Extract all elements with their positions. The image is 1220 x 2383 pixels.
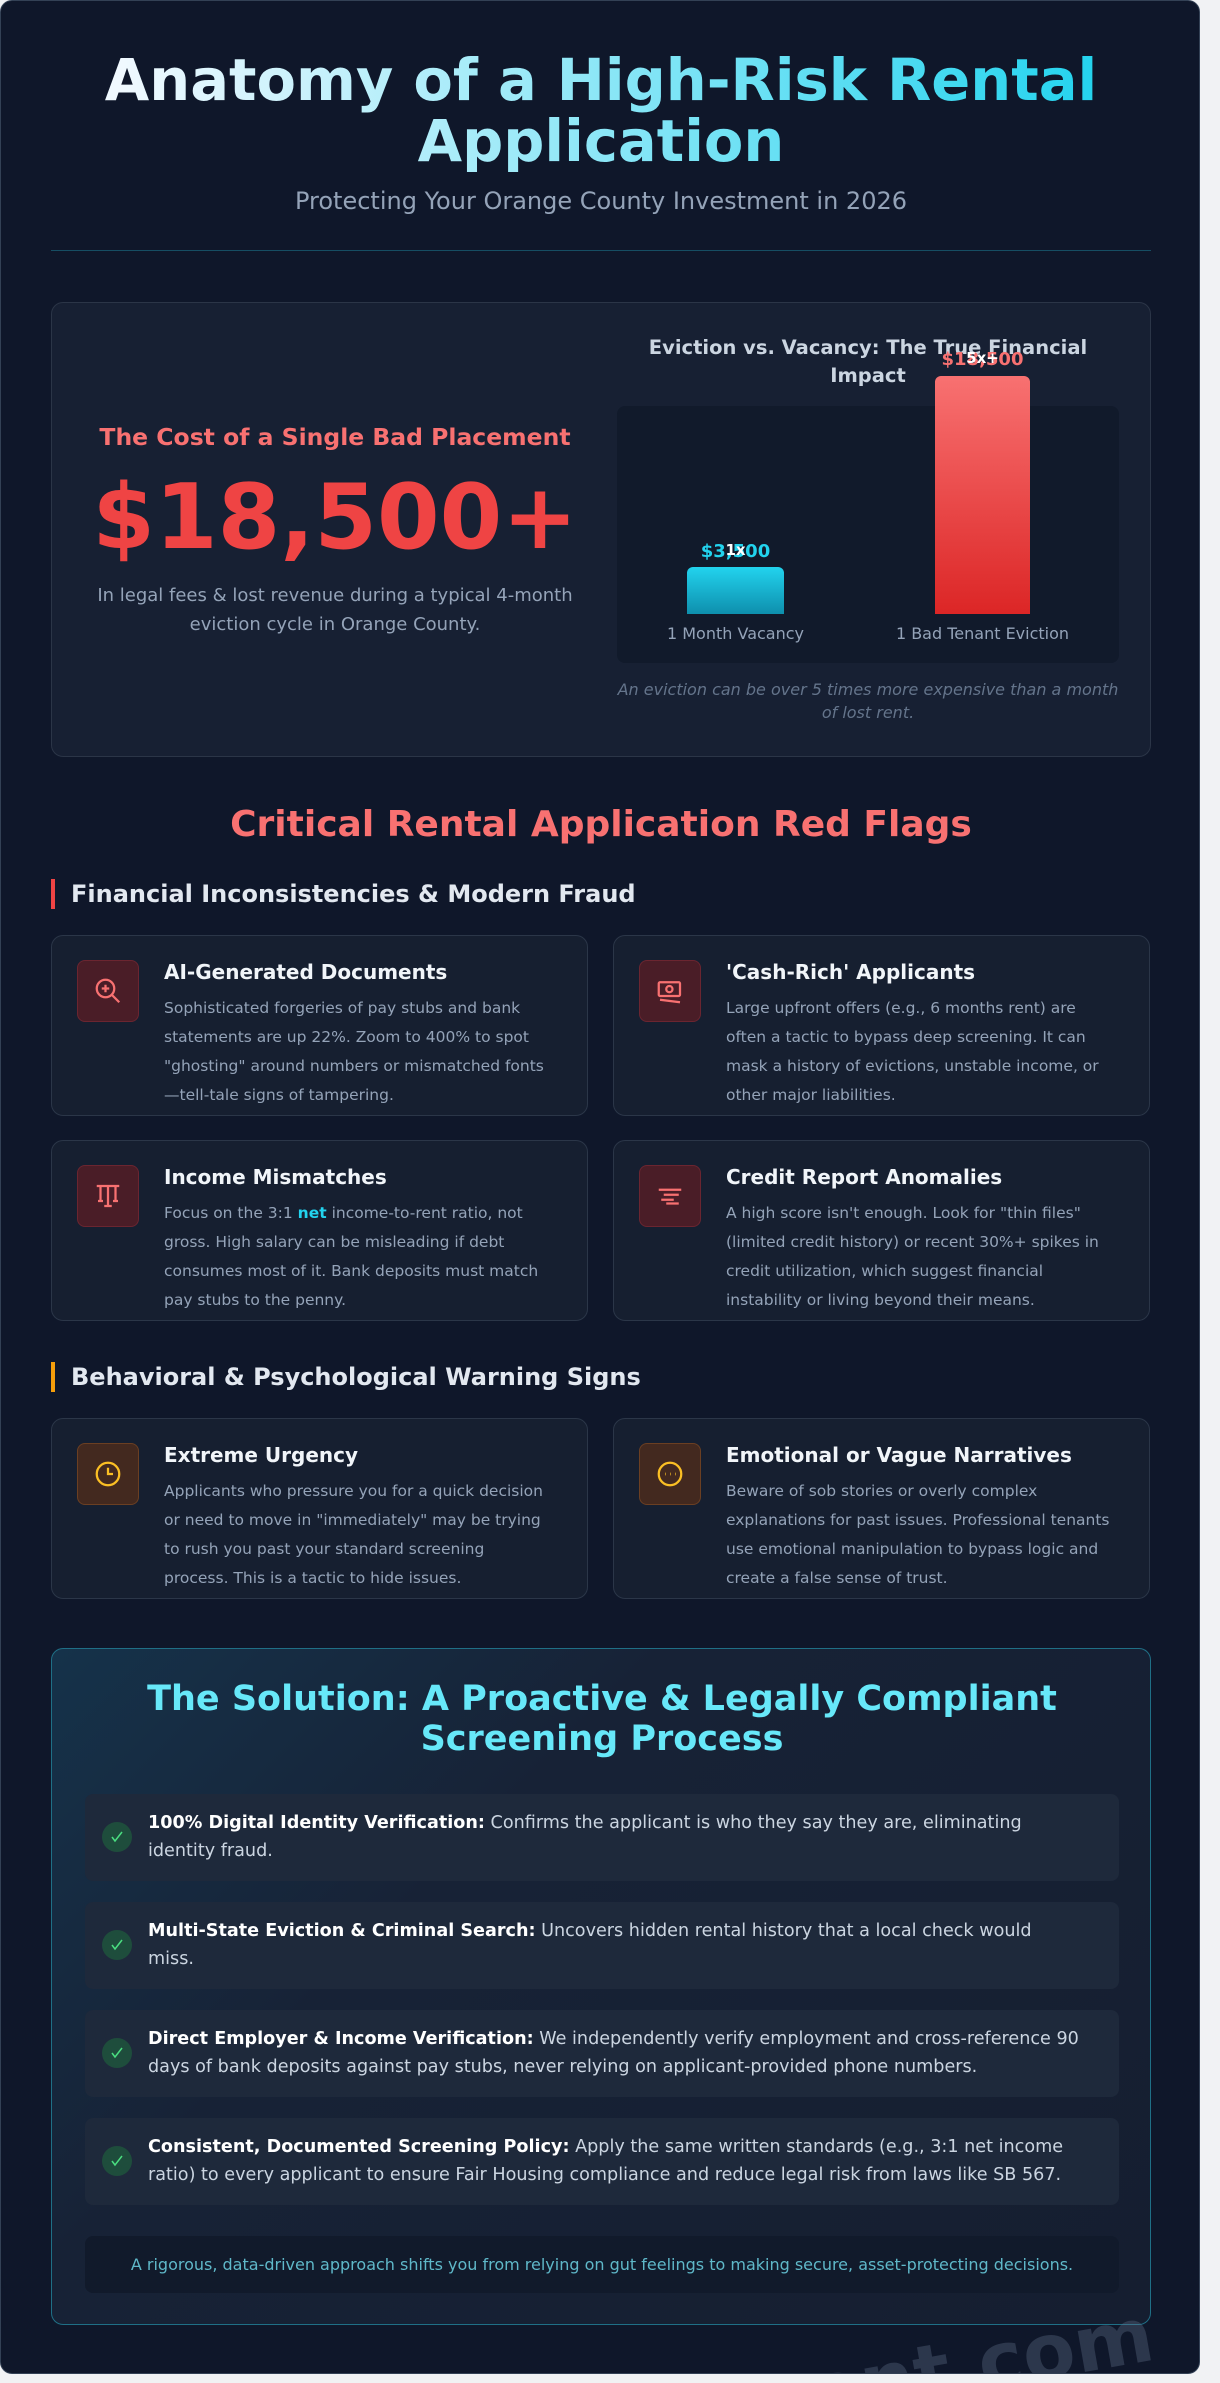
card: income mismatch [51,1140,588,1321]
panel: solution [51,1648,1151,2325]
section heading: red flags: Critical Rental Application Red Flags [230,804,972,845]
item 1 [85,1794,1119,1881]
title [1,50,1201,172]
item 2: miss. [148,1949,194,1969]
card: income mismatch: Focus on the 3:1 net income-to-rent ratio, not gross. High salary can be misleading if debt consumes most of it. Bank deposits must match pay stubs to the penny. [164,1204,538,1309]
card: AI documents: AI-Generated Documents [164,960,447,984]
item 1: 100% Digital Identity Verification: Confirms the applicant is who they say they are, eliminating [148,1813,1022,1833]
card: urgency: Applicants who pressure you for a quick decision or need to move in "immediately" may be trying to rush you past your standard screening process. This is a tactic to hide issues. [164,1482,543,1587]
solution title [147,1679,1057,1759]
card: cash-rich: 'Cash-Rich' Applicants [726,960,975,984]
item 3 [85,2010,1119,2097]
item 2: Multi-State Eviction & Criminal Search: Uncovers hidden rental history that a local check would [148,1921,1032,1941]
card: narratives: Emotional or Vague Narratives [726,1443,1072,1467]
icon: magnifier [77,960,139,1022]
card: narratives: Beware of sob stories or overly complex explanations for past issues. Professional tenants use emotional manipulation to bypass logic and create a false sense of trust. [726,1482,1110,1587]
footer note: A rigorous, data-driven approach shifts you from relying on gut feelings to making secure, asset-protecting decisions. [131,2255,1073,2274]
item 4 [85,2118,1119,2205]
title: Application [418,108,784,175]
panel: cost of bad placement: 1 Month Vacancy [667,624,804,643]
icon: lines [639,1165,701,1227]
title: Anatomy of a High-Risk Rental [105,47,1097,114]
panel: cost of bad placement: 1 Bad Tenant Eviction [896,624,1069,643]
description: In legal fees & lost revenue during a typical 4-month eviction cycle in Orange County. [97,585,573,635]
subtitle: Protecting Your Orange County Investment in 2026 [295,187,907,215]
footer note [85,2236,1119,2293]
panel: cost of bad placement: $18,500 [942,349,1023,370]
card: urgency [51,1418,588,1599]
subheading: financial: Financial Inconsistencies & Modern Fraud [71,880,636,908]
item 1: identity fraud. [148,1841,273,1861]
card: credit anomalies: Credit Report Anomalies [726,1165,1002,1189]
panel: cost of bad placement: $3,500 [701,541,770,562]
heading: cost: The Cost of a Single Bad Placement [99,423,571,451]
item 3: Direct Employer & Income Verification: We independently verify employment and cross‑reference 90 [148,2029,1079,2049]
icon: cash [639,960,701,1022]
card: urgency: Extreme Urgency [164,1443,358,1467]
bar chart [617,406,1119,663]
solution title: The Solution: A Proactive & Legally Compliant [147,1679,1057,1719]
chart caption: An eviction can be over 5 times more expensive than a month of lost rent. [618,680,1118,722]
icon: chat [639,1443,701,1505]
big number: $18,500+ [92,465,578,570]
item 3: days of bank deposits against pay stubs, never relying on applicant-provided phone numbers. [148,2057,977,2077]
panel: cost of bad placement [51,302,1151,757]
panel: cost of bad placement: 1x [725,541,746,559]
subheading: behavioral: Behavioral & Psychological Warning Signs [71,1363,641,1391]
card: AI documents: Sophisticated forgeries of pay stubs and bank statements are up 22%. Zoom to 400% to spot "ghosting" around numbers or mismatched fonts —tell-tale signs of tampering. [164,999,544,1104]
item 4: ratio) to every applicant to ensure Fair Housing compliance and reduce legal risk from laws like SB 567. [148,2165,1061,2185]
card: income mismatch: Income Mismatches [164,1165,387,1189]
card: narratives [613,1418,1150,1599]
item 4: Consistent, Documented Screening Policy: Apply the same written standards (e.g., 3:1 net income [148,2137,1063,2157]
card: cash-rich [613,935,1150,1116]
chart title: Eviction vs. Vacancy: The True Financial Impact [649,336,1087,387]
icon: clock [77,1443,139,1505]
icon: scale [77,1165,139,1227]
card: credit anomalies: A high score isn't enough. Look for "thin files" (limited credit history) or recent 30%+ spikes in credit utilization, which suggest financial instability or living beyond their means. [726,1204,1099,1309]
card: cash-rich: Large upfront offers (e.g., 6 months rent) are often a tactic to bypass deep screening. It can mask a history of evictions, unstable income, or other major liabilities. [726,999,1099,1104]
card: credit anomalies [613,1140,1150,1321]
panel: cost of bad placement: 5x+ [966,349,999,367]
solution title: Screening Process [421,1719,783,1759]
card: AI documents [51,935,588,1116]
item 2 [85,1902,1119,1989]
